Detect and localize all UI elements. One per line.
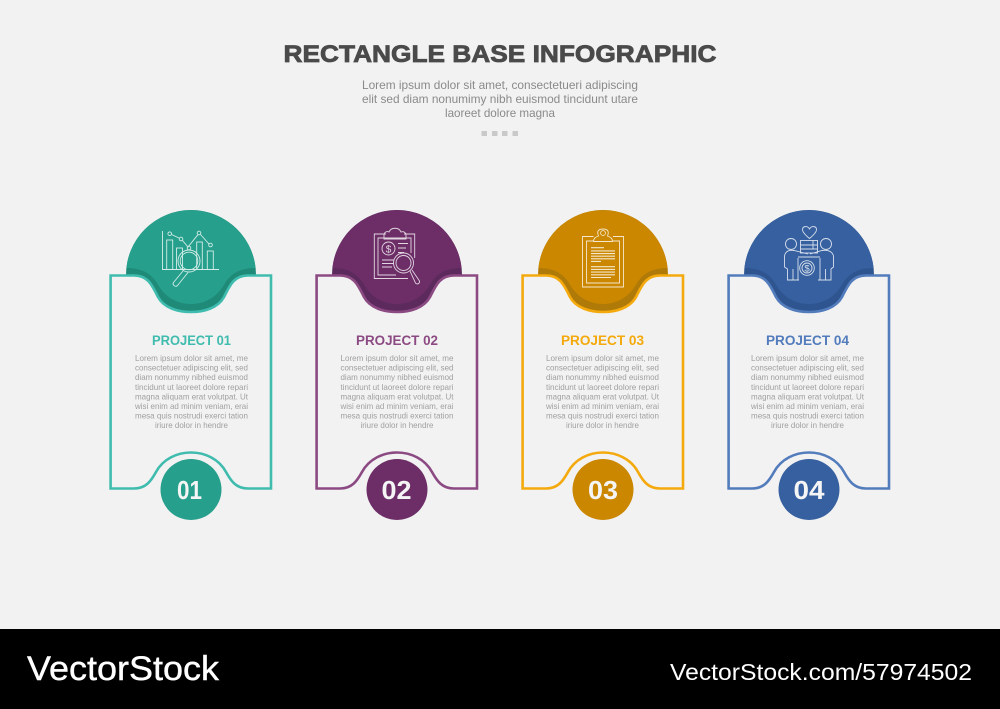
text block 01: Lorem ipsum dolor sit amet, me (135, 353, 248, 363)
number badge 02: 02 (382, 477, 412, 505)
text block 04: diam nonummy nibhed euismod (751, 372, 864, 382)
number badge 03 (572, 459, 634, 520)
text block 03: mesa quis nostrudi exerci tation (546, 411, 659, 421)
text block 03: wisi enim ad minim veniam, erai (545, 401, 659, 411)
circle header 02 (332, 210, 462, 312)
text block 03: magna aliquam erat volutpat. Ut (546, 391, 660, 401)
text block 04: consectetuer adipiscing elit, sed (751, 363, 864, 373)
footer bar (0, 629, 1000, 709)
text block 04: mesa quis nostrudi exerci tation (751, 411, 864, 421)
text block 01 (134, 353, 249, 430)
heading 01: PROJECT 01 (152, 333, 231, 348)
text block 03: Lorem ipsum dolor sit amet, me (546, 353, 659, 363)
heading 03: PROJECT 03 (561, 333, 644, 348)
text block 01: mesa quis nostrudi exerci tation (135, 411, 248, 421)
text block 01: magna aliquam erat volutpat. Ut (135, 391, 249, 401)
heading 04: PROJECT 04 (766, 333, 849, 348)
circle header 04 (744, 210, 874, 312)
title dots (482, 131, 518, 136)
card outline 03 (523, 276, 683, 488)
circle header 03 (538, 210, 668, 312)
number badge 04 (778, 459, 840, 520)
icon: clipboard (582, 229, 624, 287)
number badge 02 (366, 459, 428, 520)
panel: project 04 (729, 210, 889, 520)
text block 04: Lorem ipsum dolor sit amet, me (751, 353, 864, 363)
text block 03 (545, 353, 660, 430)
title: RECTANGLE BASE INFOGRAPHIC (284, 41, 717, 68)
footer url: VectorStock.com/57974502 (670, 659, 972, 685)
icon: financial report with magnifier (374, 228, 420, 284)
text block 04: wisi enim ad minim veniam, erai (750, 401, 864, 411)
circle header 01 (126, 210, 256, 312)
card outline 02 (317, 276, 477, 488)
icon: chart with magnifier (162, 231, 219, 286)
text block 02: mesa quis nostrudi exerci tation (340, 411, 454, 421)
text block 04: tincidunt ut laoreet dolore repari (751, 382, 864, 392)
number badge 01 (160, 459, 222, 520)
text block 03: tincidunt ut laoreet dolore repari (546, 382, 659, 392)
text block 02: magna aliquam erat volutpat. Ut (340, 391, 454, 401)
text block 04 (750, 353, 865, 430)
subtitle text: Lorem ipsum dolor sit amet, consectetueri adipiscing (362, 78, 638, 92)
subtitle text (362, 78, 638, 120)
text block 02: tincidunt ut laoreet dolore repari (340, 382, 454, 392)
subtitle text: elit sed diam nonumimy nibh euismod tincidunt utare (362, 92, 638, 106)
text block 04: iriure dolor in hendre (771, 420, 844, 430)
text block 02: iriure dolor in hendre (360, 420, 434, 430)
text block 02: wisi enim ad minim veniam, erai (340, 401, 454, 411)
footer logo: VectorStock (27, 650, 220, 688)
panel: project 01 (111, 210, 271, 520)
text block 01: wisi enim ad minim veniam, erai (134, 401, 248, 411)
text block 01: consectetuer adipiscing elit, sed (135, 363, 248, 373)
text block 02: diam nonummy nibhed euismod (340, 372, 454, 382)
panel: project 03 (523, 210, 683, 520)
number badge 01: 01 (177, 477, 202, 505)
number badge 03: 03 (588, 477, 618, 505)
number badge 04: 04 (794, 477, 825, 505)
icon: financial report with magnifier: $ (386, 244, 392, 256)
text block 01: iriure dolor in hendre (155, 420, 228, 430)
heading 02: PROJECT 02 (356, 333, 438, 348)
card outline 01 (111, 276, 271, 488)
text block 03: diam nonummy nibhed euismod (546, 372, 659, 382)
text block 02: Lorem ipsum dolor sit amet, me (340, 353, 454, 363)
icon: people with heart and money (784, 227, 834, 280)
text block 02 (340, 353, 454, 430)
text block 03: consectetuer adipiscing elit, sed (546, 363, 659, 373)
text block 02: consectetuer adipiscing elit, sed (340, 363, 454, 373)
text block 01: diam nonummy nibhed euismod (135, 372, 248, 382)
text block 03: iriure dolor in hendre (566, 420, 639, 430)
card outline 04 (729, 276, 889, 488)
subtitle text: laoreet dolore magna (445, 106, 555, 120)
panel: project 02 (317, 210, 477, 520)
icon: people with heart and money: $ (804, 264, 810, 274)
text block 04: magna aliquam erat volutpat. Ut (751, 391, 865, 401)
text block 01: tincidunt ut laoreet dolore repari (135, 382, 248, 392)
